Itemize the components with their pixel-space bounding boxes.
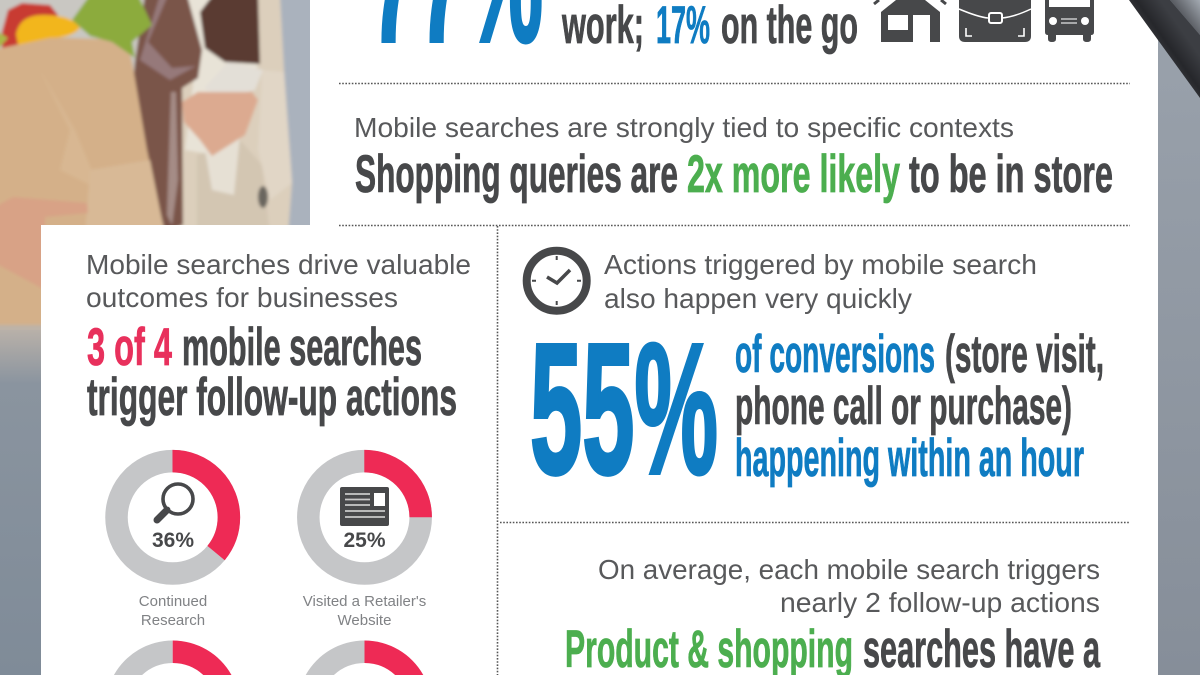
coat [178, 0, 294, 225]
hand [182, 92, 258, 156]
text: conversions detail [735, 325, 1104, 488]
text: follow-up actions: On average, each mobile search triggers [598, 554, 1100, 585]
text: valuable outcomes: outcomes for businesses [86, 282, 398, 313]
donut chart: visited a retailer's website 25%: Website [338, 612, 391, 629]
text: valuable outcomes: Mobile searches drive valuable [86, 249, 471, 280]
text: valuable outcomes [86, 249, 471, 313]
icon: briefcase [959, 0, 1031, 42]
hair [200, 0, 260, 64]
icon: web page [340, 487, 389, 526]
divider lines [339, 84, 1130, 675]
text: work; 17% on the go [561, 0, 858, 55]
statistic: 55%: 55% [530, 306, 718, 513]
icon: magnifying glass [157, 484, 193, 520]
heading: 3 of 4 mobile searches [87, 318, 457, 427]
donut chart: visited a retailer's website 25% [303, 461, 426, 629]
text: shopping context subheading: Mobile searches are strongly tied to specific contexts [354, 112, 1014, 143]
donut chart: lower left, cropped [114, 641, 232, 675]
donut chart: continued research 36%: 36% [152, 529, 194, 552]
text: follow-up actions: nearly 2 follow-up actions [780, 587, 1100, 618]
heading: 3 of 4 mobile searches: mobile searches [182, 318, 422, 377]
icon: bus [1045, 0, 1094, 42]
heading: shopping queries: 2x more likely [687, 145, 900, 204]
donut chart: continued research 36%: Continued [139, 593, 207, 610]
text: actions happen quickly: also happen very quickly [604, 283, 912, 314]
heading: 3 of 4 mobile searches: 3 of 4 [87, 318, 172, 377]
groceries [2, 3, 58, 48]
donut chart: continued research 36%: Research [141, 612, 205, 629]
donut chart: visited a retailer's website 25%: 25% [343, 529, 386, 552]
donut chart: visited a retailer's website 25%: Visited a Retailer's [303, 593, 426, 610]
icon: clock [527, 251, 587, 311]
donut chart: lower right, cropped [306, 641, 423, 675]
icon: home [874, 0, 946, 42]
text: actions happen quickly: Actions triggered by mobile search [604, 249, 1037, 280]
shirt [185, 0, 258, 155]
heading: shopping queries: Shopping queries are [355, 145, 678, 204]
supporting hand [0, 197, 88, 290]
donut chart: continued research 36% [116, 461, 229, 629]
sleeve [205, 136, 240, 195]
pen: dark stylus at top right corner [1129, 0, 1200, 98]
paper bag [0, 37, 165, 325]
scarf [133, 0, 202, 232]
phone [246, 68, 263, 93]
text: conversions detail: of conversions [735, 325, 935, 384]
text: follow-up actions [598, 554, 1100, 618]
photo: woman with grocery bag using a phone [0, 0, 315, 340]
coat button [258, 186, 268, 208]
heading: 3 of 4 mobile searches: trigger follow-up actions [87, 368, 457, 427]
text: actions happen quickly [604, 249, 1037, 314]
